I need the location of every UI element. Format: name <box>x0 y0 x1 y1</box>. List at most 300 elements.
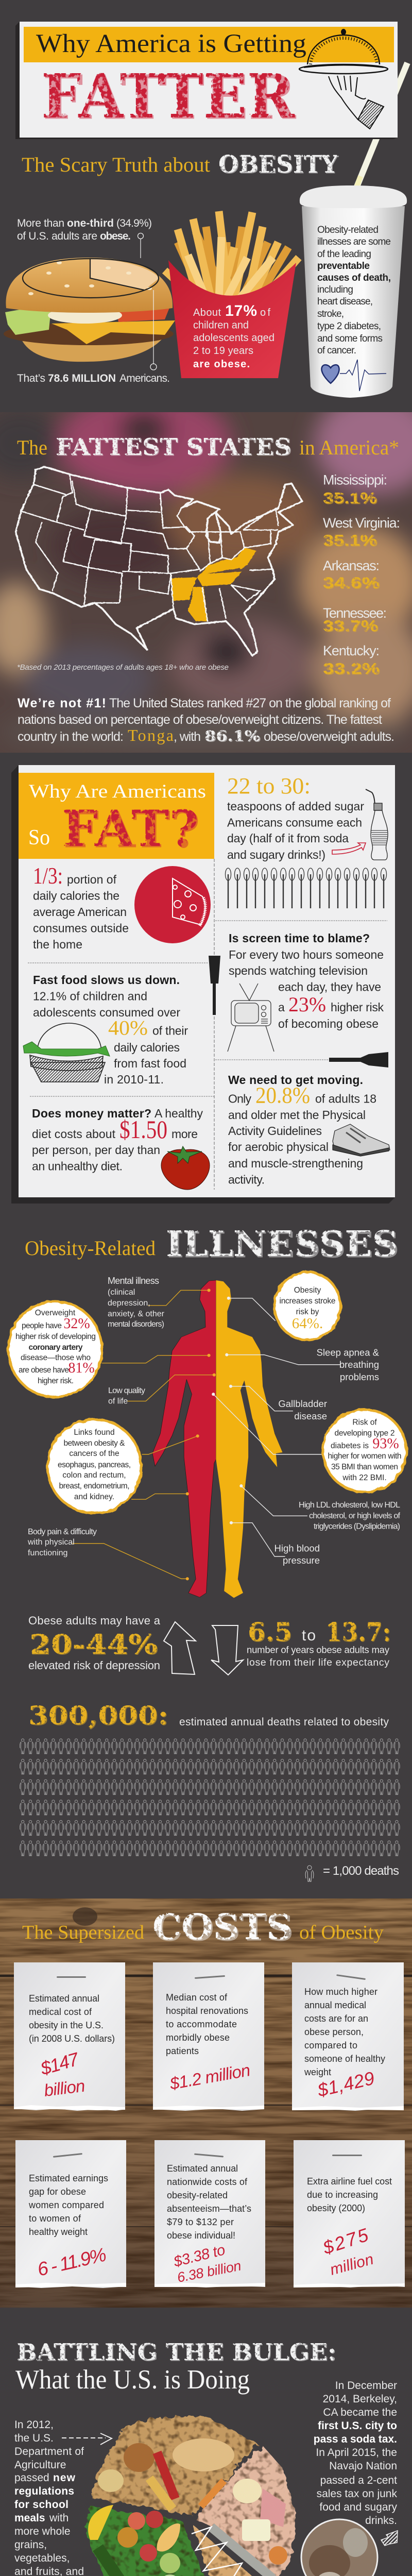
receipt: airline fuel: Extra airline fuel cost <box>307 2176 392 2187</box>
text: obesity-related illnesses: causes of death, <box>317 273 391 283</box>
text block: we're not number one: We’re not #1! <box>18 696 106 710</box>
labels: illness names: depression, <box>108 1299 150 1308</box>
text block: usda school meals: more whole <box>14 2526 71 2537</box>
stat: 300,000 deaths: estimated annual deaths related to obesity <box>179 1716 389 1728</box>
text: obesity-related illnesses: and some forms <box>317 333 383 344</box>
receipt: airline fuel <box>294 2140 405 2287</box>
block: screen time: a <box>278 1001 285 1014</box>
text block: usda school meals: with <box>49 2512 68 2524</box>
list: top five fattest states: Kentucky: <box>323 643 380 658</box>
receipt: absenteeism costs: Estimated annual <box>167 2163 238 2174</box>
block: fast food: from fast food <box>114 1057 186 1070</box>
block: 22 to 30 teaspoons: day (half of it from soda <box>227 832 349 845</box>
text: one third of adults <box>17 217 152 242</box>
panel: why are americans so fat <box>11 765 395 1204</box>
text block: we're not number one: The United States ranked #27 on the global ranking of <box>109 696 391 710</box>
labels: illness names: Gallbladder <box>278 1398 327 1409</box>
heading: the fattest states in america: FATTEST STATES <box>56 433 291 461</box>
text block: usda school meals: passed <box>14 2472 49 2484</box>
stat: elevated risk of depression: Obese adults may have a <box>28 1614 161 1627</box>
receipt: airline fuel: due to increasing <box>307 2190 378 2200</box>
labels: illness names: of life <box>108 1397 128 1405</box>
text: 17 percent of children: are obese. <box>193 359 250 370</box>
wedge: grains <box>92 2416 258 2515</box>
receipt: earnings gap <box>15 2140 126 2288</box>
text: obesity-related illnesses: preventable <box>317 261 370 272</box>
text: obesity-related illnesses: type 2 diabetes, <box>317 321 381 332</box>
receipt: higher annual costs: someone of healthy <box>304 2054 385 2064</box>
receipt: absenteeism costs <box>154 2140 265 2287</box>
stat: lost life expectancy: 13.7: <box>325 1617 391 1647</box>
receipt: higher annual costs: obese person, <box>304 2027 364 2037</box>
footnote: map basis: *Based on 2013 percentages of adults ages 18+ who are obese <box>17 663 229 672</box>
text block: usda school meals: regulations <box>14 2485 74 2497</box>
icon: retro television <box>228 984 274 1052</box>
block: get moving: and muscle-strengthening <box>228 1157 363 1170</box>
receipt: hospital renovations: patients <box>166 2046 199 2056</box>
icon: striped arrow to soda <box>381 2531 398 2546</box>
block: screen time: of becoming obese <box>278 1017 379 1030</box>
icon: running shoes <box>333 1124 390 1156</box>
labels: illness names: functioning <box>28 1549 67 1557</box>
text block: we're not number one: Tonga <box>128 726 174 744</box>
receipt: higher annual costs: How much higher <box>304 1987 377 1997</box>
stat: 300,000 deaths <box>28 1700 389 1731</box>
labels: illness names: cholesterol, or high levels of <box>309 1512 401 1520</box>
block: one third of calories: 1/3: <box>33 862 63 889</box>
callout: coronary artery disease: higher risk. <box>38 1377 74 1385</box>
receipt: higher annual costs: costs are for an <box>304 2013 368 2024</box>
list: top five fattest states: Arkansas: <box>323 558 380 573</box>
callout: cancer links: and kidney. <box>74 1493 114 1501</box>
block: does money matter <box>32 1107 203 1173</box>
block: does money matter: A healthy <box>154 1107 203 1120</box>
title: why america is getting: Why America is Getting <box>36 29 306 58</box>
list: top five fattest states: West Virginia: <box>323 515 400 531</box>
icon grid: three hundred figures <box>19 1738 401 1861</box>
block: screen time: spends watching television <box>229 964 368 977</box>
text block: soda tax: sales tax on junk <box>317 2488 397 2500</box>
callout: stroke risk <box>274 1272 340 1340</box>
block: get moving: and older met the Physical <box>228 1108 366 1122</box>
block: get moving: We need to get moving. <box>228 1073 363 1087</box>
block: does money matter: an unhealthy diet. <box>32 1159 123 1173</box>
callout: cancer links: colon and rectum, <box>62 1471 126 1480</box>
callout: cancer links: breast, endometrium, <box>59 1482 130 1490</box>
panel: burger pie chart <box>4 217 175 384</box>
wedge: fruit and vegetables <box>85 2505 218 2576</box>
callout: stroke risk: risk by <box>296 1308 319 1316</box>
icon: vertical spatula <box>209 956 220 1015</box>
block: fast food: of their <box>152 1024 188 1038</box>
heading: the fattest states in america: The <box>17 436 47 459</box>
block: fast food: in 2010-11. <box>104 1073 164 1086</box>
labels: illness names: Mental illness <box>108 1276 159 1286</box>
receipt: hospital renovations: to accommodate <box>166 2019 237 2029</box>
text: 17 percent of children: 2 to 19 years <box>193 345 253 357</box>
receipt: earnings gap: healthy weight <box>29 2227 88 2237</box>
callout: type 2 diabetes <box>323 1410 406 1492</box>
text: obesity-related illnesses: of the leading <box>317 249 371 260</box>
diagram: human body with connectors <box>72 1280 340 1598</box>
icon: burger <box>4 258 175 362</box>
block: fast food: 40% <box>108 1016 148 1040</box>
labels: illness names: triglycerides (Dyslipidemia) <box>314 1522 400 1531</box>
receipt: airline fuel: million <box>328 2251 375 2279</box>
callout: coronary artery disease: disease—those who <box>21 1353 91 1362</box>
heading: obesity-related illnesses <box>25 1224 398 1265</box>
list: top five fattest states: 35.1% <box>323 531 377 549</box>
map: united states with top five states highlighted <box>16 467 302 656</box>
list: top five fattest states: Tennessee: <box>323 605 387 621</box>
text: obesity-related illnesses: of cancer. <box>317 345 356 356</box>
text block: usda school meals: Department of <box>14 2446 84 2458</box>
text block: usda school meals: new <box>53 2472 76 2484</box>
icon: waiter hand with cloche <box>299 29 388 129</box>
heading: battling the bulge <box>15 2338 336 2395</box>
labels: illness names: (clinical <box>108 1288 135 1297</box>
text: one third of adults: More than <box>17 217 64 229</box>
block: get moving: 20.8% <box>255 1083 310 1108</box>
text block: soda tax: 2014, Berkeley, <box>323 2393 397 2405</box>
block: get moving: Only <box>228 1092 251 1106</box>
text: obesity-related illnesses: heart disease, <box>317 296 373 307</box>
text block: we're not number one: obese/overweight adults. <box>264 730 394 744</box>
labels: illness names: anxiety, & other <box>108 1310 165 1318</box>
callout: coronary artery disease: Overweight <box>35 1309 76 1317</box>
stat: lost life expectancy: number of years obese adults may <box>247 1645 390 1655</box>
receipt: annual medical cost: (in 2008 U.S. dollars) <box>29 2033 115 2044</box>
icon: pizza on red plate <box>134 866 211 943</box>
callout: coronary artery disease: higher risk of developing <box>15 1332 96 1341</box>
block: one third of calories <box>33 862 129 951</box>
receipt: higher annual costs: $1,429 <box>315 2067 376 2101</box>
callout: type 2 diabetes: with 22 BMI. <box>342 1473 387 1482</box>
callout: type 2 diabetes: diabetes is <box>331 1442 369 1450</box>
receipt: airline fuel: obesity (2000) <box>307 2203 365 2213</box>
receipt: airline fuel: $275 <box>320 2224 371 2259</box>
text: one third of adults: of U.S. adults are <box>17 230 97 242</box>
labels: illness names: with physical <box>27 1538 75 1547</box>
stat: lost life expectancy: lose from their life expectancy <box>247 1657 389 1668</box>
receipt: hospital renovations: Median cost of <box>166 1992 228 2003</box>
panel: fries box <box>165 211 299 378</box>
block: does money matter: $1.50 <box>119 1115 167 1144</box>
receipt: higher annual costs: compared to <box>304 2040 357 2050</box>
labels: illness names: breathing <box>339 1359 379 1370</box>
block: one third of calories: average American <box>33 905 127 919</box>
heading: the supersized costs of obesity <box>22 1907 384 1948</box>
block: fast food <box>33 973 188 1086</box>
block: screen time <box>229 931 384 1030</box>
text block: we're not number one: , with <box>174 730 201 744</box>
heading block: So <box>28 826 50 850</box>
block: get moving: Activity Guidelines <box>228 1124 322 1138</box>
text: 78.6 million americans <box>17 372 170 384</box>
callout: type 2 diabetes: 93% <box>372 1436 399 1452</box>
receipt: absenteeism costs: $3.38 to <box>171 2242 227 2270</box>
block: 22 to 30 teaspoons: 22 to 30: <box>227 773 311 799</box>
block: 22 to 30 teaspoons: teaspoons of added sugar <box>227 800 364 813</box>
heading: the fattest states in america <box>17 433 399 461</box>
text block: soda tax: drinks. <box>365 2515 397 2527</box>
text: obesity-related illnesses: illnesses are some <box>317 236 391 247</box>
list: top five fattest states <box>323 472 400 677</box>
heading: battling the bulge: BATTLING THE BULGE: <box>16 2338 336 2366</box>
heading: the supersized costs of obesity: COSTS <box>152 1907 293 1948</box>
text: 17 percent of children: 17% <box>225 302 257 319</box>
icon: horizontal spatula <box>329 1052 388 1067</box>
callout: cancer links: Links found <box>74 1428 115 1437</box>
receipt: annual medical cost: billion <box>43 2076 86 2100</box>
block: screen time: each day, they have <box>278 980 381 993</box>
wedge: protein and dairy <box>196 2446 296 2576</box>
block: one third of calories: portion of <box>67 873 117 886</box>
receipt: earnings gap: 6 - 11.9% <box>36 2244 108 2280</box>
block: get moving: for aerobic physical <box>228 1140 329 1154</box>
receipt: earnings gap: women compared <box>28 2200 104 2210</box>
stat: 300,000 deaths: 300,000: <box>28 1700 168 1731</box>
labels: illness names <box>27 1276 401 1566</box>
icon row: eighteen teaspoons <box>226 868 386 908</box>
list: top five fattest states: 33.7% <box>323 617 378 635</box>
callout: stroke risk: increases stroke <box>279 1297 336 1306</box>
labels: illness names: disease <box>294 1411 327 1421</box>
block: get moving: activity. <box>228 1173 265 1186</box>
connector lines <box>72 1290 214 1579</box>
text block: we're not number one: 86.1% <box>204 727 260 744</box>
text: 17 percent of children: of <box>260 307 270 318</box>
text: 78.6 million americans: That’s <box>17 372 45 384</box>
callout: stroke risk: Obesity <box>294 1286 321 1295</box>
text: one third of adults: (34.9%) <box>116 217 152 229</box>
callout: coronary artery disease: 81% <box>68 1360 95 1376</box>
receipt: higher annual costs: weight <box>304 2067 331 2077</box>
panel: fattest states background <box>0 392 412 753</box>
labels: illness names: High blood <box>274 1543 320 1554</box>
highlighted states <box>171 548 256 621</box>
text block: usda school meals: meals <box>14 2512 45 2524</box>
block: 22 to 30 teaspoons: and sugary drinks!) <box>227 848 325 861</box>
text: one third of adults: obese. <box>100 230 131 242</box>
stat: elevated risk of depression: 20-44% <box>29 1629 158 1660</box>
panel: wood background costs <box>0 1899 412 2308</box>
block: does money matter: diet costs about <box>32 1127 116 1141</box>
stat: elevated risk of depression <box>28 1614 161 1672</box>
block: 22 to 30 teaspoons <box>227 773 364 861</box>
callout: cancer links: esophagus, pancreas, <box>58 1461 131 1469</box>
text: obesity-related illnesses: Obesity-related <box>317 225 379 235</box>
text: 17 percent of children <box>193 302 274 370</box>
block: fast food: daily calories <box>114 1041 180 1054</box>
heading: the scary truth about obesity: OBESITY <box>218 150 338 179</box>
callout: coronary artery disease: 32% <box>63 1316 90 1332</box>
block: does money matter: Does money matter? <box>32 1107 151 1120</box>
text block: we're not number one: country in the world: <box>18 730 124 744</box>
icon: red arrow to bottle <box>332 843 366 854</box>
text: obesity-related illnesses <box>317 225 391 356</box>
text block: we're not number one <box>18 696 394 744</box>
text block: soda tax: first U.S. city to <box>318 2420 397 2432</box>
block: fast food: Fast food slows us down. <box>33 973 180 987</box>
callout: type 2 diabetes: 35 BMI than women <box>331 1463 398 1471</box>
block: does money matter: more <box>171 1127 198 1141</box>
text: one third of adults: one-third <box>67 217 114 229</box>
block: screen time: 23% <box>288 993 326 1016</box>
callout: stroke risk: 64%. <box>292 1315 323 1332</box>
icon: tomato <box>161 1146 210 1190</box>
callout: type 2 diabetes: Risk of <box>352 1418 377 1427</box>
receipt: earnings gap: Estimated earnings <box>29 2173 108 2183</box>
gold half of body <box>216 1280 282 1598</box>
receipt: hospital renovations <box>153 1962 264 2111</box>
text: 17 percent of children: children and <box>193 319 249 331</box>
text block: usda school meals: vegetables, <box>14 2552 70 2564</box>
text block: usda school meals: In 2012, <box>14 2419 54 2431</box>
receipt: hospital renovations: $1.2 million <box>168 2060 252 2093</box>
heading: battling the bulge: What the U.S. is Doing <box>15 2365 250 2395</box>
red half of body <box>152 1280 216 1597</box>
list: top five fattest states: 33.2% <box>323 659 380 677</box>
image: healthy food plate <box>85 2416 296 2576</box>
list: top five fattest states: 34.6% <box>323 574 380 591</box>
title: fatter: FATTER <box>41 60 295 132</box>
text block: usda school meals: the U.S. <box>14 2432 54 2444</box>
heading: the supersized costs of obesity: of Obesity <box>299 1922 384 1943</box>
stat: elevated risk of depression: elevated risk of depression <box>28 1659 160 1672</box>
text block: usda school meals: for school <box>14 2499 68 2511</box>
callout: type 2 diabetes: higher for women with <box>328 1452 402 1461</box>
receipt: hospital renovations: morbidly obese <box>166 2032 230 2043</box>
callout: coronary artery disease: coronary artery <box>29 1343 83 1352</box>
labels: illness names: problems <box>340 1371 379 1382</box>
panel: soda cup <box>300 176 407 398</box>
receipt: earnings gap: gap for obese <box>29 2187 86 2197</box>
list: top five fattest states: Mississippi: <box>323 472 387 487</box>
list: top five fattest states: 35.1% <box>323 489 377 507</box>
heading: the fattest states in america: in America* <box>299 436 399 459</box>
stat: lost life expectancy: 6.5 <box>248 1617 292 1647</box>
title card <box>15 22 398 139</box>
block: 22 to 30 teaspoons: Americans consume each <box>227 816 362 829</box>
heading block: Why Are Americans <box>29 781 206 802</box>
icon: down arrow <box>211 1625 243 1675</box>
block: screen time: higher risk <box>331 1001 384 1014</box>
callout: coronary artery disease <box>8 1301 102 1397</box>
receipt: absenteeism costs: $79 to $132 per <box>167 2217 234 2227</box>
receipt: absenteeism costs: 6.38 billion <box>176 2258 243 2285</box>
receipt: higher annual costs <box>292 1962 404 2111</box>
receipt: higher annual costs: annual medical <box>304 2000 366 2010</box>
block: one third of calories: daily calories the <box>33 889 119 903</box>
receipt: annual medical cost <box>14 1962 125 2111</box>
receipt: absenteeism costs: nationwide costs of <box>167 2177 248 2187</box>
callout: type 2 diabetes: developing type 2 <box>335 1429 394 1437</box>
stat: lost life expectancy: to <box>302 1627 316 1644</box>
heading: obesity-related illnesses: Obesity-Related <box>25 1236 156 1260</box>
block: fast food: adolescents consumed over <box>33 1006 180 1019</box>
text block: we're not number one: nations based on percentage of obese/overweight citizens. The fattest <box>18 713 382 727</box>
receipt: earnings gap: to women of <box>29 2213 81 2224</box>
legend: one figure equals 1,000 deaths <box>305 1864 399 1882</box>
legend: one figure equals 1,000 deaths: = 1,000 deaths <box>323 1864 399 1878</box>
block: get moving <box>228 1073 376 1186</box>
text block: usda school meals <box>14 2419 84 2576</box>
receipt: annual medical cost: $147 <box>38 2048 82 2079</box>
block: fast food: 12.1% of children and <box>33 989 147 1003</box>
text: obesity-related illnesses: stroke, <box>317 309 344 319</box>
text block: soda tax <box>314 2380 398 2527</box>
icon: drinking straw <box>356 63 407 189</box>
text: 78.6 million americans: 78.6 MILLION <box>48 372 116 384</box>
text block: soda tax: Navajo Nation <box>329 2460 397 2472</box>
heading block <box>19 773 214 859</box>
text block: usda school meals: Agriculture <box>14 2459 66 2471</box>
text block: soda tax: passed a 2-cent <box>320 2475 397 2486</box>
heading block: FAT? <box>62 800 199 858</box>
heading: the scary truth about obesity: The Scary Truth about <box>22 153 210 176</box>
text block: soda tax: CA became the <box>323 2406 397 2418</box>
callout: cancer links: between obesity & <box>64 1439 125 1448</box>
stat: lost life expectancy <box>247 1617 391 1668</box>
text: 17 percent of children: adolescents aged <box>193 332 274 344</box>
callout: coronary artery disease: are obese have <box>19 1366 69 1375</box>
icon: up arrow <box>164 1622 196 1674</box>
block: does money matter: per person, per day than <box>32 1143 160 1157</box>
labels: illness names: Body pain & difficulty <box>28 1528 97 1536</box>
icon: dashed arrows to plate <box>62 2433 112 2576</box>
receipt: absenteeism costs: absenteeism—that’s <box>167 2204 251 2214</box>
block: one third of calories: the home <box>33 938 82 951</box>
text: 78.6 million americans: Americans. <box>119 372 170 384</box>
labels: illness names: Low quality <box>108 1386 145 1395</box>
block: screen time: For every two hours someone <box>229 948 384 961</box>
text: obesity-related illnesses: including <box>317 284 353 295</box>
block: one third of calories: consumes outside <box>33 921 129 935</box>
icon: heart with ecg line <box>321 360 386 391</box>
block: screen time: Is screen time to blame? <box>229 931 370 945</box>
labels: illness names: mental disorders) <box>108 1320 164 1329</box>
image: iced soda from above <box>301 2519 377 2576</box>
text block: soda tax: In April 2015, the <box>316 2447 397 2459</box>
heading: the supersized costs of obesity: The Supersized <box>22 1922 144 1943</box>
labels: illness names: pressure <box>283 1555 320 1566</box>
heading: the scary truth about obesity <box>22 150 338 179</box>
callout: coronary artery disease: people have <box>22 1321 62 1330</box>
receipt: hospital renovations: hospital renovations <box>166 2006 248 2016</box>
receipt: absenteeism costs: obese individual! <box>167 2230 235 2241</box>
labels: illness names: High LDL cholesterol, low HDL <box>299 1501 400 1510</box>
receipt: annual medical cost: medical cost of <box>29 2007 92 2017</box>
text: 17 percent of children: About <box>193 307 221 318</box>
text block: soda tax: In December <box>335 2380 397 2392</box>
wedge: treats with scribble <box>192 2525 263 2576</box>
text block: usda school meals: grains, <box>14 2539 47 2551</box>
icon: soda bottle <box>366 789 388 860</box>
state borders <box>16 467 302 656</box>
receipt: annual medical cost: Estimated annual <box>29 1993 99 2004</box>
callout: cancer links <box>47 1419 141 1513</box>
callout: cancer links: cancers of the <box>69 1449 119 1458</box>
receipt: annual medical cost: obesity in the U.S. <box>29 2020 104 2030</box>
block: get moving: of adults 18 <box>315 1092 376 1106</box>
text block: soda tax: food and sugary <box>319 2501 398 2513</box>
icon: hamburger drawing <box>23 1023 110 1082</box>
text block: soda tax: pass a soda tax. <box>314 2433 397 2445</box>
labels: illness names: Sleep apnea & <box>317 1347 380 1358</box>
heading: obesity-related illnesses: ILLNESSES <box>166 1224 398 1265</box>
receipt: absenteeism costs: obesity-related <box>167 2190 228 2200</box>
